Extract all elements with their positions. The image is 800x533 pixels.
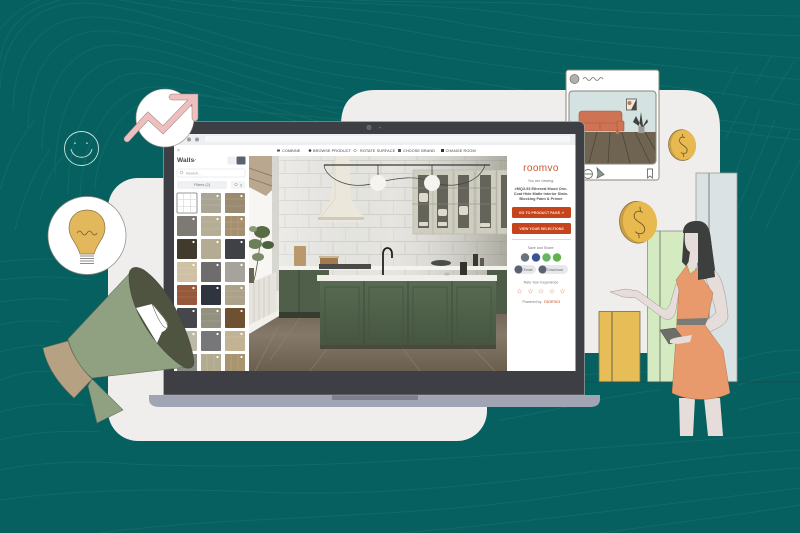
sofa xyxy=(579,111,624,134)
pointing arm xyxy=(610,284,680,319)
mouth xyxy=(129,267,194,368)
icon: small dollar coin xyxy=(666,128,698,162)
go to product page button: GO TO PRODUCT PAGE ↗ xyxy=(519,211,564,215)
belt xyxy=(677,318,708,325)
product sidebar: Download xyxy=(547,268,563,272)
cutting board and pot xyxy=(294,246,306,266)
icon: light bulb in circle xyxy=(48,196,126,274)
share buttons: Save and Share: xyxy=(528,246,554,250)
glass cabinets xyxy=(413,170,507,234)
product sidebar: Email xyxy=(524,268,533,272)
rating stars: Rate Your Experience xyxy=(524,280,558,284)
island xyxy=(317,275,497,349)
squiggle xyxy=(583,78,603,80)
product text: You are viewing: xyxy=(528,179,554,183)
range hood xyxy=(318,156,364,222)
laptop xyxy=(149,122,600,407)
materials panel: Search... xyxy=(186,172,201,176)
email and download pills xyxy=(514,265,536,274)
icon: growth arrow in circle xyxy=(127,89,195,147)
laptop bezel xyxy=(164,122,584,395)
avatar xyxy=(570,74,579,84)
view selections button xyxy=(512,223,571,234)
materials panel: 2 xyxy=(240,184,242,188)
left wall and window xyxy=(249,156,278,291)
woman figure xyxy=(610,221,730,436)
webcam xyxy=(367,125,371,130)
roman shade xyxy=(249,156,272,196)
product sidebar: roomvo xyxy=(544,299,560,305)
laptop base xyxy=(149,395,600,407)
product sidebar: Coat Hide Matte Interior Stain- xyxy=(514,192,569,196)
plant xyxy=(248,226,274,283)
mouth opening xyxy=(136,304,168,343)
card action icons xyxy=(584,168,652,178)
browser window xyxy=(174,134,576,371)
icon: large dollar coin xyxy=(617,199,660,246)
social media card xyxy=(566,70,659,180)
floor xyxy=(249,291,507,371)
panel: left backdrop xyxy=(108,178,487,441)
toolbar: ROTATE SURFACE xyxy=(360,149,396,153)
material swatches xyxy=(177,193,245,371)
back counter and cabinets xyxy=(279,266,507,270)
storage box: light blue xyxy=(696,173,737,382)
handle xyxy=(88,379,123,423)
materials panel: Walls xyxy=(177,157,195,164)
arm holding tablet xyxy=(672,270,728,342)
hinge notch xyxy=(332,395,418,400)
icon: smiley xyxy=(64,132,98,166)
dress xyxy=(672,265,730,399)
hair front xyxy=(683,221,715,280)
rear cap xyxy=(43,341,92,398)
toolbar: × xyxy=(177,148,180,154)
icon: megaphone xyxy=(43,267,194,423)
wall art xyxy=(626,99,636,110)
plant xyxy=(633,112,648,133)
neck and face xyxy=(685,233,698,270)
materials panel: Filters (2) xyxy=(194,183,211,187)
room picture xyxy=(569,91,656,164)
panel: right backdrop xyxy=(341,90,737,353)
kitchen photo xyxy=(248,156,507,371)
legs xyxy=(679,398,723,436)
toolbar: BROWSE PRODUCT xyxy=(313,149,352,153)
filter buttons xyxy=(177,181,227,189)
toolbar xyxy=(177,148,476,154)
go to product page button xyxy=(512,207,571,218)
toolbar: CHANGE ROOM xyxy=(446,149,476,153)
product sidebar: ☆ xyxy=(559,288,566,296)
tablet xyxy=(660,328,685,344)
toolbar: COMBINE xyxy=(282,149,301,153)
hair back xyxy=(682,221,716,280)
pendant lights xyxy=(324,165,490,191)
product sidebar: ☆ xyxy=(538,288,544,296)
product sidebar: #MQ3-53 Ethereal Mood One- xyxy=(515,187,568,191)
product sidebar: ☆ xyxy=(527,288,534,296)
roomvo logo: roomvo xyxy=(523,163,559,174)
window seat xyxy=(249,272,276,325)
search box xyxy=(177,169,245,177)
cone xyxy=(68,274,187,378)
product sidebar: Blocking Paint & Primer xyxy=(519,197,563,201)
storage box: yellow xyxy=(599,312,640,382)
toolbar: CHOOSE BRAND xyxy=(403,149,435,153)
product sidebar: ☆ xyxy=(549,288,555,296)
product sidebar: ☆ xyxy=(516,288,523,296)
materials panel xyxy=(175,156,249,371)
powered by: Powered by xyxy=(523,300,542,304)
tile wall xyxy=(278,156,507,276)
storage box: green xyxy=(648,231,696,382)
view selections button: VIEW YOUR SELECTIONS xyxy=(519,227,564,231)
product sidebar xyxy=(507,156,576,371)
faucet and items on island xyxy=(383,248,392,275)
